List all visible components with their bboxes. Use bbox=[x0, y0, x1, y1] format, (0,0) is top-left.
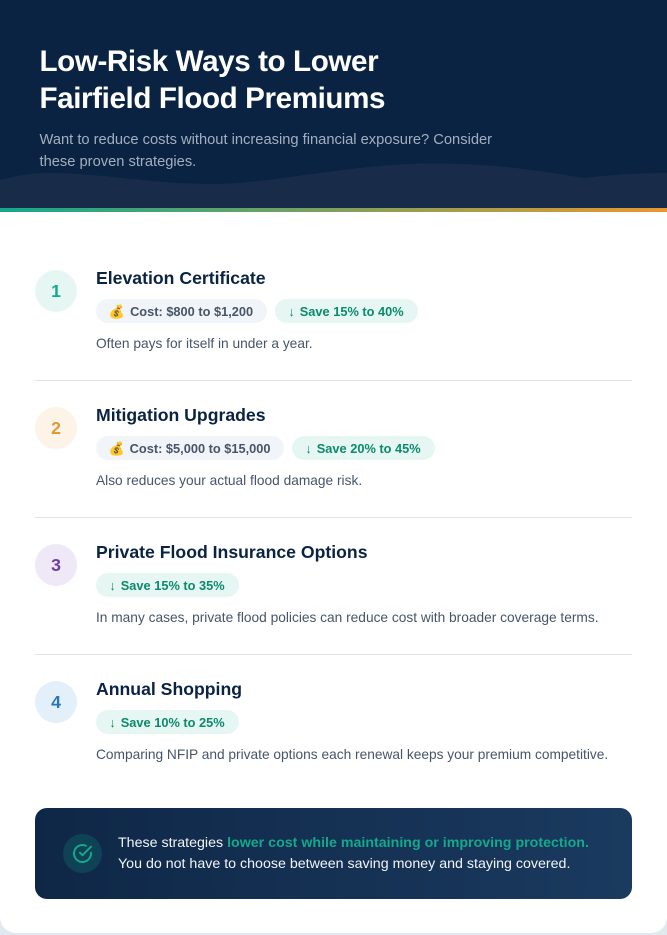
savings pill: ↓ Save 15% to 40% bbox=[288, 304, 404, 319]
savings pill: ↓ Save 10% to 25% bbox=[109, 715, 225, 730]
number badge 2: 2 bbox=[51, 418, 61, 438]
subtitle: Want to reduce costs without increasing financial exposure? Consider bbox=[40, 132, 492, 148]
savings pill bbox=[96, 710, 239, 734]
title: Fairfield Flood Premiums bbox=[40, 82, 385, 115]
description: Comparing NFIP and private options each renewal keeps your premium competitive. bbox=[96, 747, 608, 762]
cost and savings pills bbox=[96, 299, 418, 323]
step heading: Private Flood Insurance Options bbox=[96, 542, 368, 562]
step heading: Elevation Certificate bbox=[96, 268, 266, 288]
number badge 2 bbox=[35, 407, 77, 449]
number badge 4 bbox=[35, 681, 77, 723]
callout bbox=[35, 808, 632, 899]
callout text bbox=[118, 834, 589, 872]
savings pill: ↓ Save 20% to 45% bbox=[305, 441, 421, 456]
savings pill: ↓ Save 15% to 35% bbox=[109, 578, 225, 593]
divider bbox=[35, 654, 632, 655]
description: In many cases, private flood policies can reduce cost with broader coverage terms. bbox=[96, 610, 599, 625]
callout text: These strategies lower cost while maintaining or improving protection. bbox=[118, 834, 589, 850]
step 1: elevation certificate bbox=[35, 268, 418, 351]
number badge 4: 4 bbox=[51, 692, 61, 712]
cost pill: 💰 Cost: $800 to $1,200 bbox=[109, 304, 253, 320]
description: Also reduces your actual flood damage risk. bbox=[96, 473, 362, 488]
divider bbox=[35, 380, 632, 381]
title bbox=[40, 45, 385, 115]
savings pill bbox=[275, 299, 418, 323]
step heading: Annual Shopping bbox=[96, 679, 242, 699]
number badge 3 bbox=[35, 544, 77, 586]
wave bbox=[0, 164, 667, 208]
step 3: private flood insurance bbox=[35, 542, 599, 625]
icon: check circle bbox=[63, 834, 102, 873]
number badge 1: 1 bbox=[51, 281, 61, 301]
step heading: Mitigation Upgrades bbox=[96, 405, 266, 425]
number badge 3: 3 bbox=[51, 555, 61, 575]
cost pill bbox=[96, 436, 284, 460]
number badge 1 bbox=[35, 270, 77, 312]
title: Low-Risk Ways to Lower bbox=[40, 45, 378, 78]
callout text: You do not have to choose between saving money and staying covered. bbox=[118, 856, 570, 872]
savings pill bbox=[96, 573, 239, 597]
cost and savings pills bbox=[96, 436, 435, 460]
cost pill bbox=[96, 299, 267, 323]
subtitle: these proven strategies. bbox=[40, 154, 196, 170]
header banner bbox=[0, 0, 667, 208]
step 2: mitigation upgrades bbox=[35, 405, 435, 488]
cost pill: 💰 Cost: $5,000 to $15,000 bbox=[108, 441, 271, 457]
description: Often pays for itself in under a year. bbox=[96, 336, 313, 351]
step 4: annual shopping bbox=[35, 679, 608, 762]
gradient accent bar bbox=[0, 208, 667, 212]
divider bbox=[35, 517, 632, 518]
savings pill bbox=[292, 436, 435, 460]
subtitle bbox=[40, 132, 492, 170]
